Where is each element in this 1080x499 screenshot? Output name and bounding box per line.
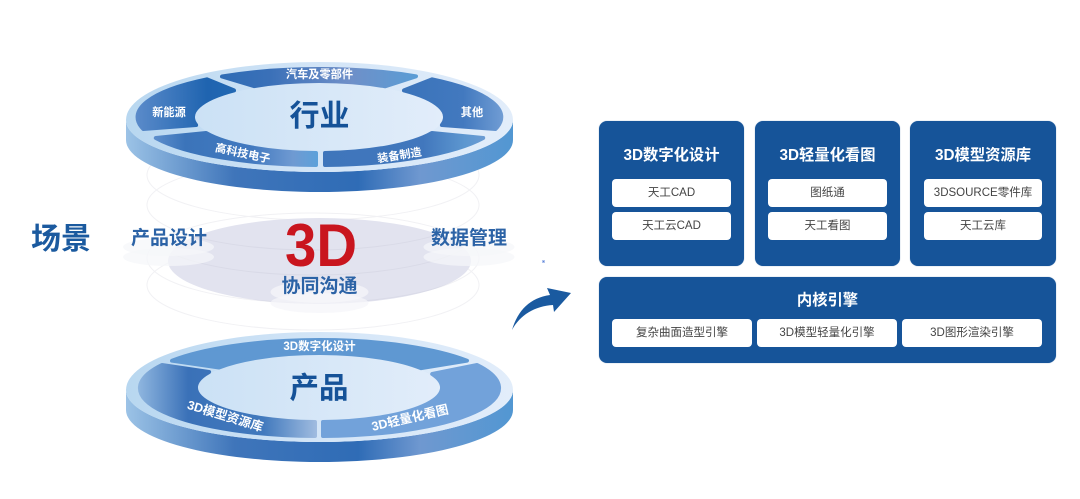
item: 3DSOURCE parts: 3DSOURCE零件库 xyxy=(934,187,1032,199)
pedestal: collaboration xyxy=(270,281,368,313)
panel title: 3D轻量化看图 xyxy=(779,147,876,164)
inner hub xyxy=(195,83,443,151)
label: other: 其他 xyxy=(461,105,483,119)
inner rings over lavender xyxy=(194,236,444,302)
label: electronics: 高科技电子 xyxy=(214,140,272,166)
label: collaboration: 协同沟通 xyxy=(281,275,358,297)
item: Tiangong viewer: 天工看图 xyxy=(804,220,850,232)
panel title: 3D数字化设计 xyxy=(623,147,720,164)
item: Tiangong Cloud CAD xyxy=(612,212,731,240)
label: new energy: 新能源 xyxy=(152,105,186,119)
middle lavender disc xyxy=(168,218,471,304)
item: Tiangong CAD: 天工CAD xyxy=(648,187,695,199)
item: Tiangong cloud library xyxy=(924,212,1042,240)
item: model lightweight engine xyxy=(757,319,897,347)
label: lightweight viewing: 3D轻量化看图 xyxy=(370,401,450,434)
item: surface modeling engine: 复杂曲面造型引擎 xyxy=(636,327,728,339)
label: equipment: 装备制造 xyxy=(376,145,423,165)
pedestal: product design xyxy=(123,238,214,266)
segment: equipment xyxy=(325,133,483,165)
panel: 3D lightweight viewing xyxy=(755,121,900,266)
faint guide rings xyxy=(147,130,479,330)
item: graphics rendering engine: 3D图形渲染引擎 xyxy=(930,327,1014,339)
disc: industry xyxy=(126,62,513,192)
3D heading: 3D xyxy=(285,212,357,279)
panel title: 内核引擎 xyxy=(797,292,858,309)
item: Tiangong Cloud CAD: 天工云CAD xyxy=(642,220,701,232)
item: Tiangong cloud library: 天工云库 xyxy=(960,220,1006,232)
panel: kernel engines xyxy=(599,277,1056,363)
segment: other xyxy=(404,79,501,129)
label: model library: 3D模型资源库 xyxy=(186,397,265,434)
panel title: 3D模型资源库 xyxy=(935,147,1031,164)
inner hub xyxy=(198,355,440,420)
panel: 3D model library xyxy=(910,121,1056,266)
heading: products: 产品 xyxy=(289,372,349,405)
segment: lightweight viewing xyxy=(323,365,499,436)
segment: digital design xyxy=(172,340,467,368)
label: automotive: 汽车及零部件 xyxy=(286,67,353,81)
item: 3DSOURCE parts xyxy=(924,179,1042,207)
label: data management: 数据管理 xyxy=(431,226,507,249)
pedestal: data management xyxy=(424,238,514,266)
item: drawing tool xyxy=(768,179,887,207)
item: Tiangong viewer xyxy=(768,212,887,240)
arrow xyxy=(512,288,571,330)
panel: 3D digital design xyxy=(599,121,744,266)
segment: automotive xyxy=(222,69,416,86)
heading: industry: 行业 xyxy=(290,100,350,133)
item: model lightweight engine: 3D模型轻量化引擎 xyxy=(779,327,875,339)
label: digital design: 3D数字化设计 xyxy=(283,339,356,353)
segment: new energy xyxy=(138,79,234,129)
left diagram: stacked discs xyxy=(32,62,571,462)
disc: products xyxy=(126,332,513,462)
item: graphics rendering engine xyxy=(902,319,1042,347)
segment: model library xyxy=(140,365,315,436)
segment: electronics xyxy=(156,133,316,165)
item: drawing tool: 图纸通 xyxy=(810,187,845,199)
item: surface modeling engine xyxy=(612,319,752,347)
label: product design: 产品设计 xyxy=(131,227,207,249)
heading: scene: 场景 xyxy=(31,223,91,256)
item: Tiangong CAD xyxy=(612,179,731,207)
tiny marker xyxy=(542,260,544,262)
